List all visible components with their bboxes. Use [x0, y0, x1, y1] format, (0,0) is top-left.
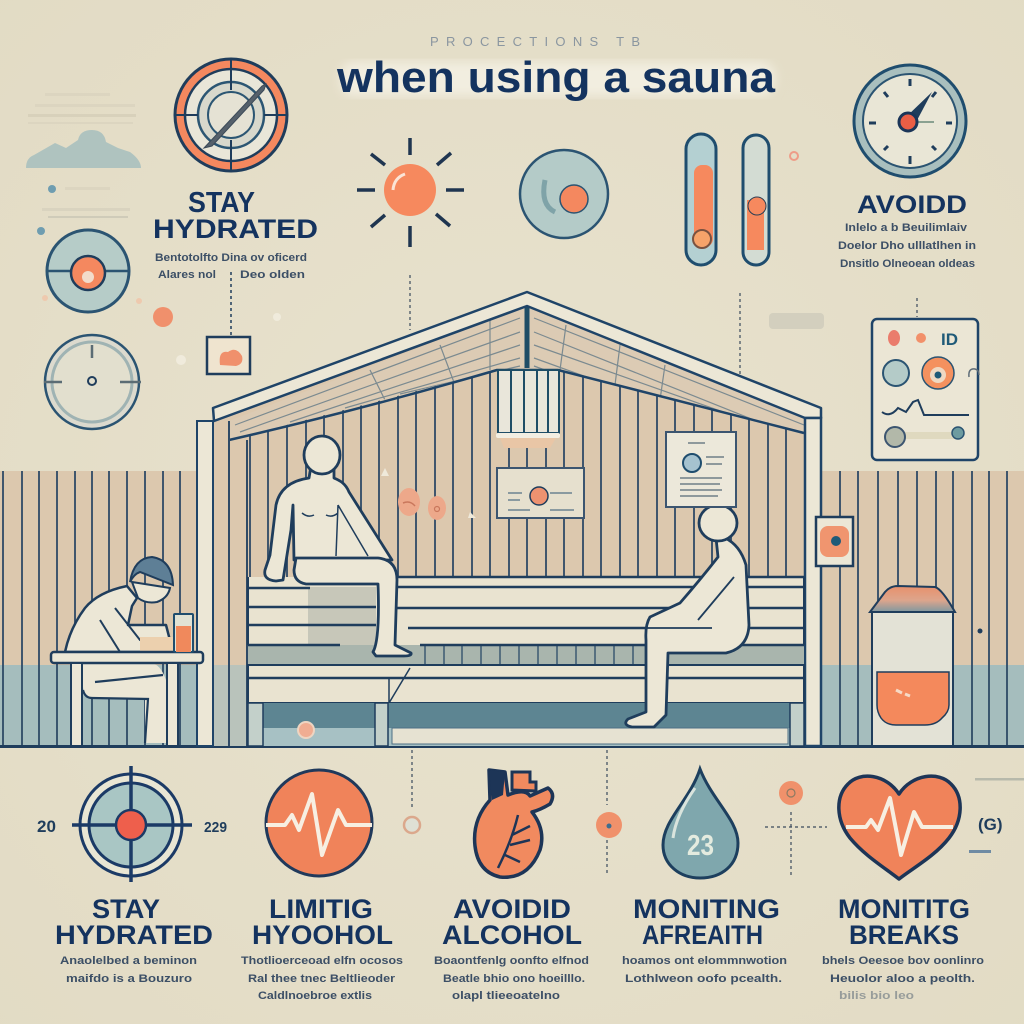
heading: avoid top right: Dnsitlo Olneoean oldeas: [840, 258, 975, 270]
wall control box: [816, 517, 853, 566]
head: [132, 582, 170, 602]
roof fascia: [213, 292, 821, 421]
column: limiting: Caldlnoebroe extlis: [258, 990, 372, 1002]
column: avoid alcohol: [434, 894, 589, 1002]
wall poster: [666, 432, 736, 507]
grey tab: [769, 313, 824, 329]
column: monitoring breaks: Heuolor aloo a peolth.: [830, 973, 975, 985]
column: stay hydrated: HYDRATED: [55, 920, 213, 950]
eyebrow text: PROCECTIONS TB: [430, 34, 640, 49]
figure: person at table: [65, 557, 173, 743]
column: avoid alcohol: Boaontfenlg oonfto elfnod: [434, 955, 589, 967]
dotted connector from sun: [409, 275, 411, 330]
title block: [336, 34, 776, 102]
table: [51, 652, 203, 746]
column: monitoring breaks: bhels Oeesoe bov oonlinro: [822, 955, 984, 967]
bench: [248, 577, 804, 746]
column: monitoring health: MONITING: [633, 894, 780, 924]
column: avoid alcohol: ALCOHOL: [442, 920, 582, 950]
icon: small framed picture: [207, 337, 250, 374]
wall planks: [250, 360, 786, 578]
column: monitoring breaks: bilis bio leo: [839, 990, 914, 1002]
column: avoid alcohol: AVOIDID: [453, 894, 571, 924]
heading: avoid top right: Inlelo a b Beuilimlaiv: [845, 222, 968, 234]
column: limiting: HYOOHOL: [252, 920, 393, 950]
column: stay hydrated: STAY: [92, 894, 160, 924]
panel: control board: [872, 319, 978, 460]
icon: no-entry compass dial: [175, 59, 287, 171]
column: stay hydrated: Anaolelbed a beminon: [60, 955, 197, 967]
icon: gauge left: [44, 335, 141, 429]
torso: [65, 586, 173, 652]
water jar: [870, 586, 955, 746]
icon: right thermometer: [743, 135, 769, 265]
slider: [885, 427, 964, 447]
column: monitoring health: hoamos ont elommnwotion: [622, 955, 787, 967]
title glow: [340, 62, 775, 96]
indicator lights: [888, 330, 958, 349]
orange marker dot: [596, 812, 622, 838]
figure: seated person left: [265, 436, 411, 656]
column: avoid alcohol: Beatle bhio ono hoeilllo.: [443, 973, 585, 985]
icon: clock gauge: [854, 65, 966, 177]
column: limiting: [241, 894, 403, 1002]
icon: teal dial: [520, 150, 608, 238]
column: avoid alcohol: olapl tlieeoatelno: [452, 990, 560, 1002]
dotted connectors bottom: [412, 750, 827, 878]
small ring marker: [404, 817, 420, 833]
wall interior: [213, 306, 821, 746]
base: [248, 703, 804, 746]
lower tint of the side wall: [213, 665, 248, 746]
left post: [197, 421, 213, 746]
icon: target: [72, 766, 192, 882]
icon: left thermometer: [686, 134, 716, 265]
arm: [100, 608, 172, 652]
indicator lights: ID: [941, 330, 958, 349]
hook on control board: [969, 369, 979, 377]
column: monitoring health: Lothlweon oofo pcealth.: [625, 973, 782, 985]
column: monitoring health: AFREAITH: [642, 920, 763, 950]
outside wall: [0, 471, 1024, 748]
icon: water drop: [663, 769, 738, 878]
wall sign with orange mark: [497, 468, 584, 518]
small pink marker: [790, 152, 798, 160]
decorative dots left: [42, 295, 281, 365]
column: stay hydrated: maifdo is a Bouzuro: [66, 973, 192, 985]
heading: stay hydrated top: [153, 187, 318, 281]
column: limiting: LIMITIG: [269, 894, 373, 924]
column: monitoring health: [622, 894, 787, 985]
under-bench gap: [248, 645, 804, 665]
dotted connector to small frame: [230, 272, 232, 335]
upper tier: [248, 577, 804, 645]
column: limiting: Ral thee tnec Beltlieoder: [248, 973, 396, 985]
column: stay hydrated: [55, 894, 213, 985]
ceiling: [229, 306, 804, 440]
legs: [83, 663, 166, 743]
right post: [805, 418, 821, 746]
left inner line: [229, 421, 247, 746]
heading: stay hydrated top: Alares nol: [158, 269, 216, 281]
heading: stay hydrated top: Deo olden: [240, 269, 305, 281]
dark wall speck: [978, 628, 982, 634]
target labels: 20: [37, 817, 56, 836]
heading: avoid top right: [838, 191, 976, 270]
bottom small orange marker: [298, 722, 314, 738]
icon: anatomical heart: [475, 770, 553, 877]
icon: pulse circle: [266, 770, 372, 876]
lamp: [496, 370, 560, 448]
column: limiting: Thotlioerceoad elfn ocosos: [241, 955, 403, 967]
icon: sun: [357, 138, 464, 247]
faint cloud with notes, top left: [26, 93, 141, 235]
column: monitoring breaks: BREAKS: [849, 920, 959, 950]
heading: stay hydrated top: STAY: [188, 187, 255, 219]
orange ring marker: [779, 781, 803, 805]
lower tier: [248, 665, 804, 703]
bottle on table: [174, 614, 193, 652]
column: monitoring breaks: [822, 894, 984, 1002]
heading: avoid top right: Doelor Dho ulllatlhen in: [838, 240, 976, 252]
dials: [883, 357, 954, 389]
icon: heart with pulse: [839, 776, 960, 879]
heading: stay hydrated top: Bentotolfto Dina ov oficerd: [155, 252, 307, 264]
column: monitoring breaks: MONITITG: [838, 894, 970, 924]
heart side labels: [969, 778, 1024, 853]
heart side labels: (G): [978, 815, 1003, 834]
main title: when using a sauna: [336, 53, 776, 102]
target labels: 229: [204, 819, 227, 836]
icon: water drop: 23: [687, 830, 714, 862]
heading: stay hydrated top: HYDRATED: [153, 214, 318, 244]
peach wall marks: [381, 468, 476, 520]
sauna cabin: [197, 292, 821, 746]
icon: small dial left: [47, 230, 129, 312]
figure: seated person right: [626, 505, 749, 727]
heading: avoid top right: AVOIDD: [857, 191, 967, 219]
dotted connectors right: [740, 293, 917, 385]
target labels: [37, 817, 227, 836]
pulse line: [882, 400, 969, 415]
